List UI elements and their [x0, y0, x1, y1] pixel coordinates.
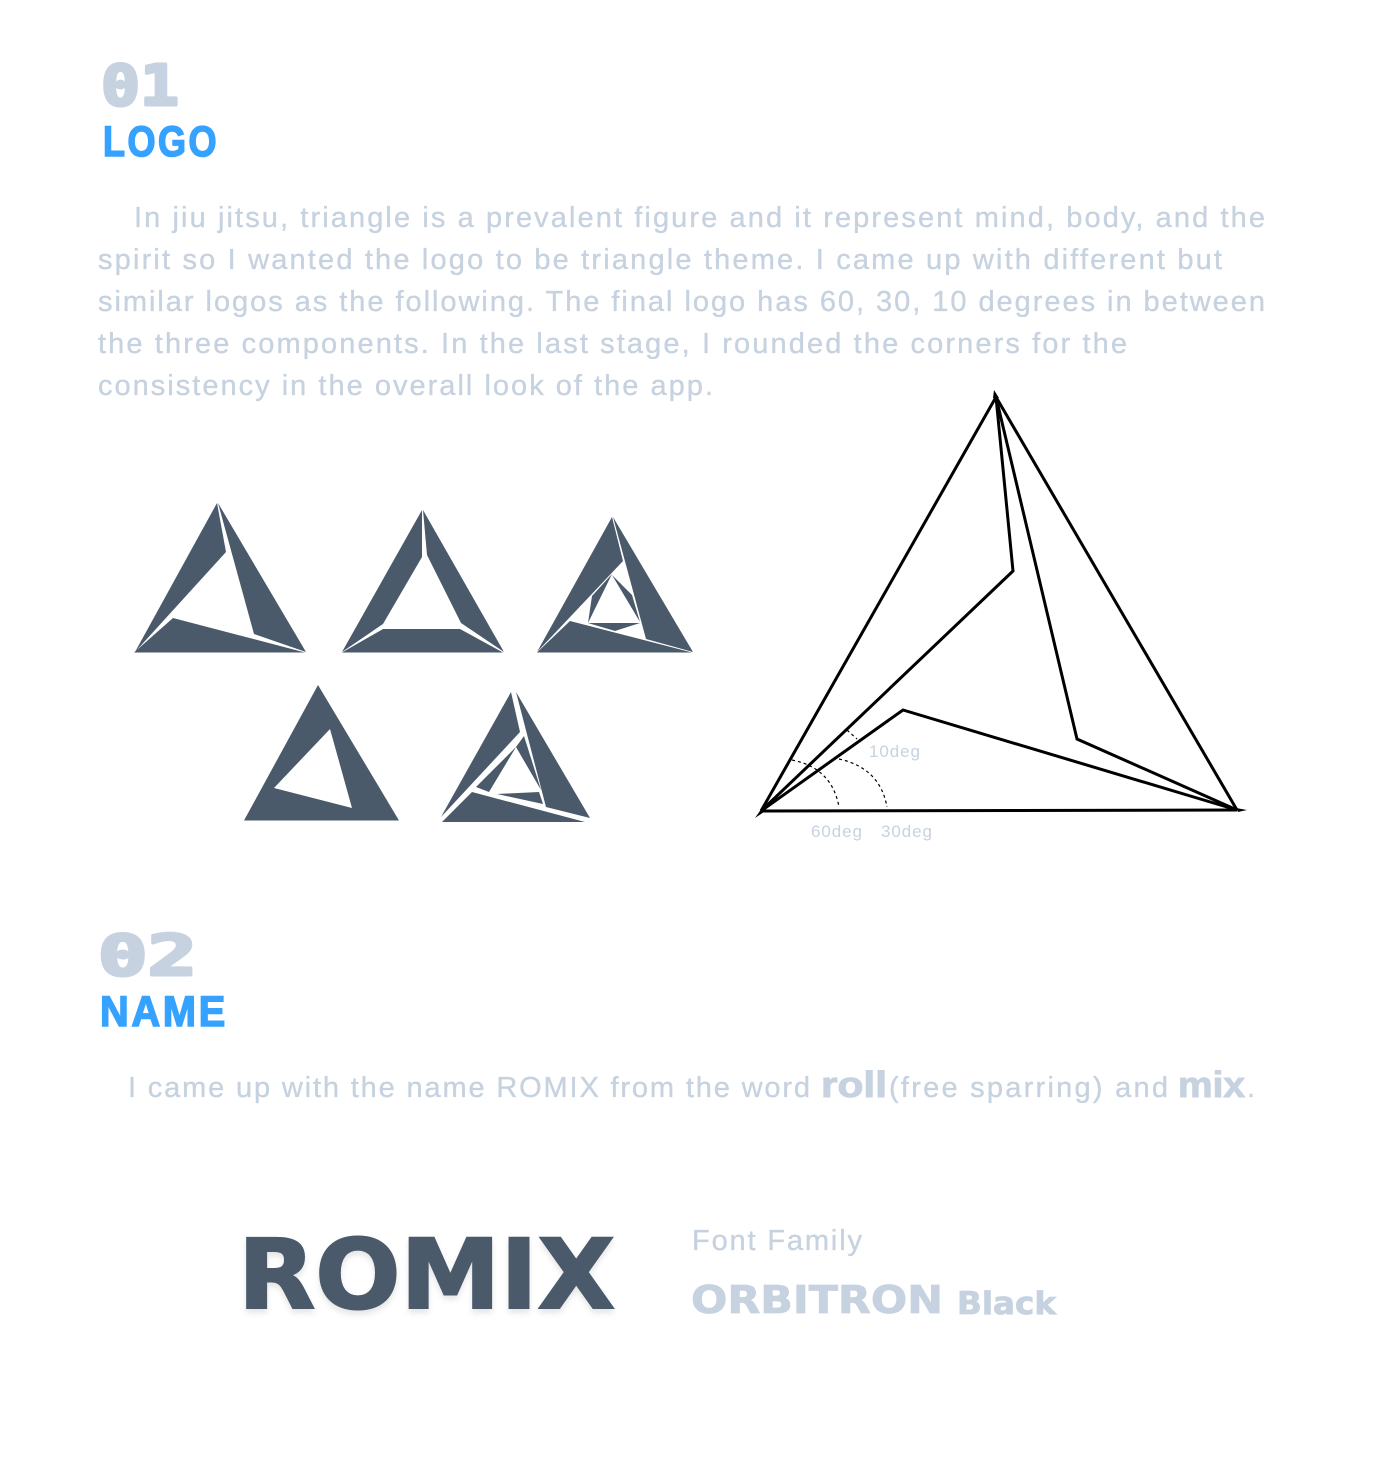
number 01: 01 [101, 54, 179, 119]
wordmark: ROMIX: ROMIX [238, 1219, 615, 1331]
label: 30deg: 30deg [881, 822, 932, 841]
name description sentence: roll [821, 1064, 887, 1105]
dashed angle arcs [792, 730, 887, 807]
logo variant 5 [441, 692, 590, 822]
font weight: Black: Black [957, 1286, 1057, 1322]
geometry diagram of final logo [755, 390, 1247, 841]
font family caption: Font Family [692, 1225, 862, 1257]
logo variant 4 [244, 685, 399, 820]
logo description paragraph: similar logos as the following. The final logo has 60, 30, 10 degrees in between [98, 286, 1265, 318]
name description sentence: . [1247, 1072, 1255, 1104]
font family caption [691, 1225, 1057, 1322]
label: 10deg: 10deg [869, 742, 920, 761]
logo description paragraph: spirit so I wanted the logo to be triangle theme. I came up with different but [98, 244, 1222, 276]
title: NAME: NAME [100, 988, 228, 1036]
section 01 heading [101, 54, 219, 166]
label: 60deg: 60deg [811, 822, 862, 841]
name description sentence [128, 1064, 1255, 1105]
outer triangle and inner wireframe [761, 397, 1237, 811]
name description sentence: (free sparring) and [889, 1072, 1168, 1104]
logo description paragraph: the three components. In the last stage, I rounded the corners for the [98, 328, 1127, 360]
logo description paragraph: consistency in the overall look of the app. [98, 370, 713, 402]
logo variant 3 [537, 517, 693, 652]
font name: ORBITRON: ORBITRON [691, 1278, 943, 1322]
logo variant 2 [342, 510, 504, 652]
title: LOGO: LOGO [103, 118, 219, 166]
section 02 heading [98, 924, 228, 1036]
corner overhang ticks [755, 390, 1247, 818]
logo description paragraph [98, 202, 1265, 402]
logo variant 1 [134, 503, 306, 652]
number 02: 02 [98, 924, 197, 989]
name description sentence: I came up with the name ROMIX from the word [128, 1072, 810, 1104]
name description sentence: mix [1178, 1064, 1245, 1105]
logo description paragraph: In jiu jitsu, triangle is a prevalent figure and it represent mind, body, and the [134, 202, 1265, 234]
